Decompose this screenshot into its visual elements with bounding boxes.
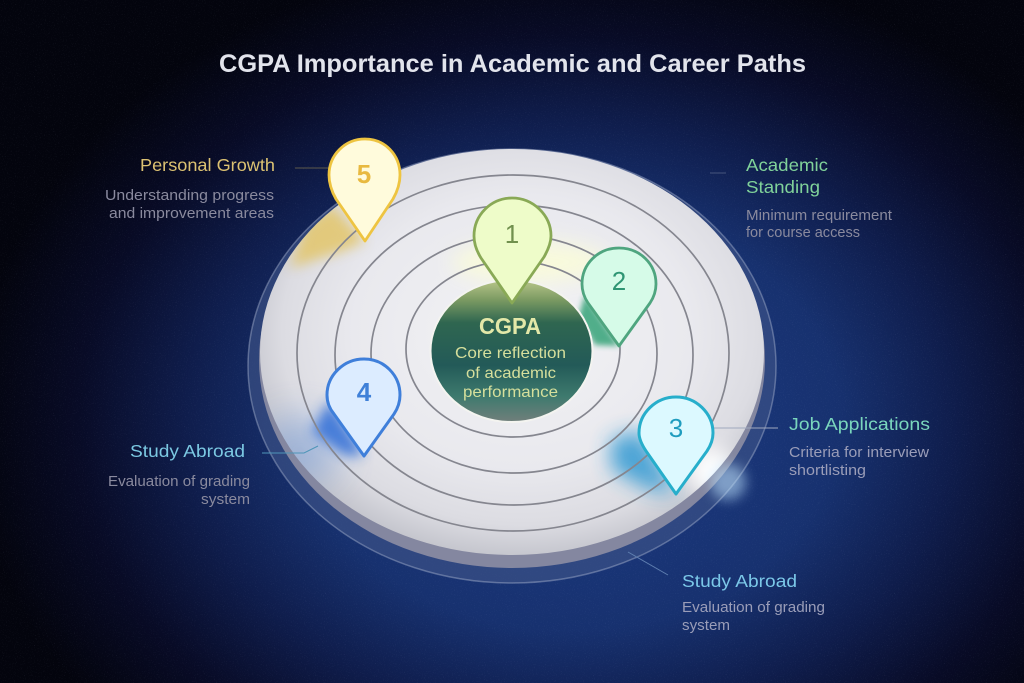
pin 2: [582, 248, 656, 346]
label: Study Abroad (bottom): Evaluation of grading: [682, 600, 825, 616]
label: Job Applications: Job Applications: [789, 414, 930, 434]
ring 4: [406, 261, 620, 437]
disc side wall: [259, 152, 765, 568]
ring 1: [297, 175, 729, 531]
label: Academic Standing: [746, 155, 892, 241]
label: Personal Growth: and improvement areas: [109, 206, 274, 222]
pin 4: [327, 359, 400, 456]
centre: CGPA: performance: [463, 384, 558, 401]
label: Academic Standing: Standing: [746, 177, 820, 197]
ring 3: [371, 235, 657, 473]
label: Job Applications: shortlisting: [789, 463, 866, 479]
connector lines: [262, 168, 778, 575]
disc top surface: [260, 149, 764, 555]
label: Study Abroad (bottom): [682, 571, 825, 634]
pin 3: [639, 397, 713, 494]
centre: CGPA: Core reflection: [455, 345, 566, 362]
ring 2: [335, 205, 693, 505]
pin 2: 2: [612, 266, 626, 296]
pin 1: [474, 198, 551, 303]
label: Personal Growth: Understanding progress: [105, 188, 274, 204]
label: Personal Growth: [105, 155, 275, 222]
label: Study Abroad (left): system: [201, 492, 250, 508]
label: Study Abroad (left): [108, 441, 250, 508]
pin 5: [329, 139, 400, 241]
pin 3: 3: [669, 413, 683, 443]
label: Study Abroad (left): Study Abroad: [130, 441, 245, 461]
label: Academic Standing: Minimum requirement: [746, 208, 892, 224]
label: Academic Standing: for course access: [746, 225, 860, 241]
label: Study Abroad (left): Evaluation of grading: [108, 474, 250, 490]
pin 1: 1: [505, 219, 519, 249]
coloured glows and pin shadows on the disc: [260, 205, 734, 496]
concentric ring disc: [248, 149, 776, 583]
bright glint on rim: [710, 464, 746, 500]
label: Job Applications: Criteria for interview: [789, 445, 930, 461]
label: Study Abroad (bottom): Study Abroad: [682, 571, 797, 591]
pin 4: 4: [357, 377, 372, 407]
label: Job Applications: [789, 414, 930, 479]
centre: CGPA: [430, 280, 592, 422]
pin 5: 5: [357, 159, 371, 189]
label: Personal Growth: Personal Growth: [140, 155, 275, 175]
label: Study Abroad (bottom): system: [682, 618, 730, 634]
label: Academic Standing: Academic: [746, 155, 828, 175]
centre: CGPA: of academic: [466, 365, 556, 382]
centre: CGPA: CGPA: [479, 313, 541, 339]
outer translucent rim: [248, 149, 776, 583]
title: CGPA Importance in Academic and Career Paths: [219, 50, 806, 78]
